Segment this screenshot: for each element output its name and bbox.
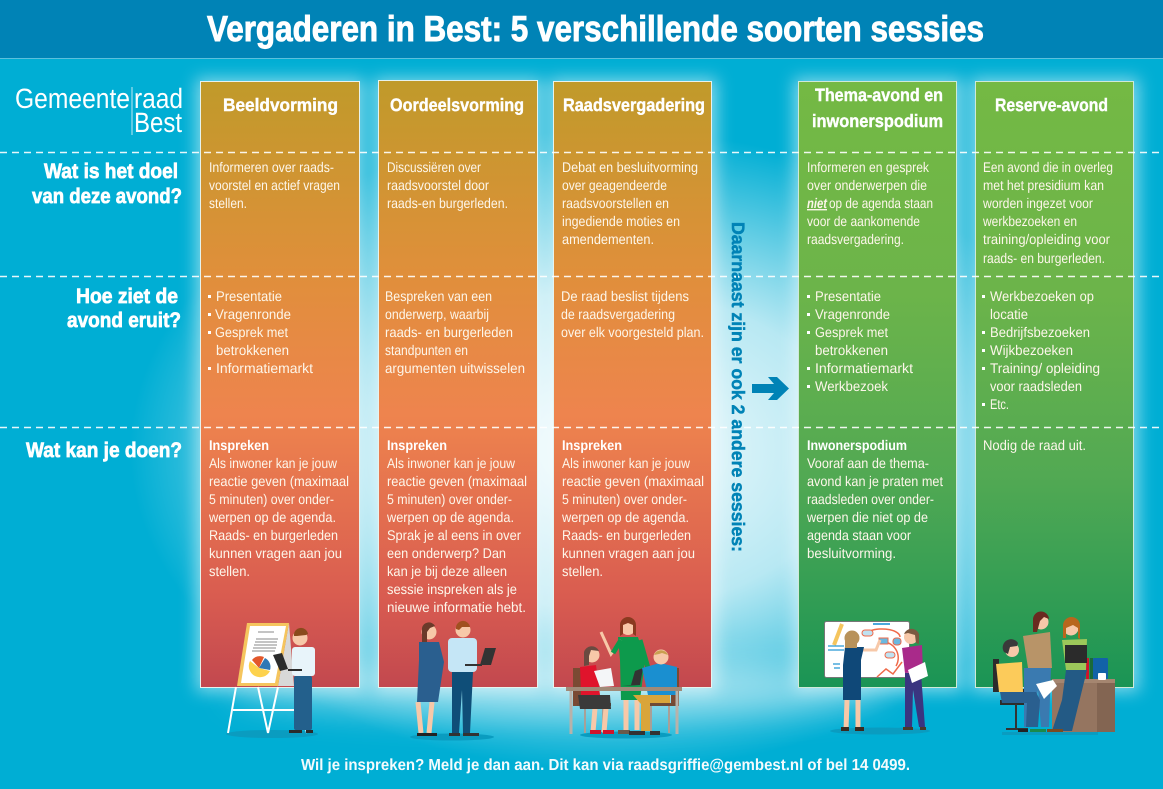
text: doen Beeldvorming: werpen op de agenda. (208, 509, 336, 525)
text: vorm Oordeelsvorming: Bespreken van een (385, 288, 492, 304)
text: doel Oordeelsvorming (387, 159, 508, 211)
text: doel Beeldvorming: Informeren over raads- (209, 159, 334, 175)
text: vorm Raadsvergadering: De raad beslist tijdens (561, 288, 689, 304)
text: doen Oordeelsvorming: reactie geven (maximaal (387, 473, 527, 489)
text: doen Beeldvorming: reactie geven (maximaal (209, 473, 349, 489)
text: doen Thema-avond: raadsleden over onder- (807, 491, 934, 507)
text: doel Beeldvorming (209, 159, 340, 211)
text: doen Oordeelsvorming (386, 437, 527, 615)
vertical text: Daarnaast zijn er ook 2 andere sessies: Daarnaast zijn er ook 2 andere sessies: (728, 222, 748, 552)
text: doen Oordeelsvorming: werpen op de agenda. (386, 509, 514, 525)
row label: Wat is het doel van deze avond?: van deze avond? (32, 185, 182, 208)
list: vorm Thema-avond: Vragenronde (815, 306, 890, 322)
text: doen Reserve-avond: Nodig de raad uit. (983, 437, 1086, 453)
text: vorm Oordeelsvorming: argumenten uitwisselen (385, 360, 525, 376)
text: doen Thema-avond: Inwonerspodium (807, 437, 907, 453)
list: vorm Reserve-avond: Training/ opleiding (990, 360, 1100, 376)
logo: Gemeenteraad Best: Gemeente (15, 83, 130, 114)
text: doen Beeldvorming: Inspreken (209, 437, 269, 453)
text: doel Reserve-avond (982, 159, 1113, 266)
list: vorm Reserve-avond: locatie (990, 306, 1028, 322)
text: vorm Oordeelsvorming: raads- en burgerleden (385, 324, 513, 340)
text: doel Thema-avond: niet (807, 195, 828, 211)
text: doen Raadsvergadering (561, 437, 704, 579)
text: doel Raadsvergadering: amendementen. (562, 231, 654, 247)
row label: Wat kan je doen?: Wat kan je doen? (26, 439, 182, 462)
heading: Thema-avond en inwonerspodium: inwonerspodium (812, 111, 943, 131)
arrow (752, 377, 789, 400)
text: doel Oordeelsvorming: raads-en burgerleden. (387, 195, 508, 211)
list: vorm Beeldvorming: Vragenronde (215, 306, 291, 322)
text: doel Reserve-avond: Een avond die in overleg (983, 159, 1113, 175)
text: doen Oordeelsvorming: 5 minuten) over onder- (387, 491, 512, 507)
text: doen Beeldvorming (208, 437, 349, 579)
text: vorm Oordeelsvorming: standpunten en (385, 342, 468, 358)
text: doen Thema-avond: agenda staan voor (807, 527, 911, 543)
text: doen Raadsvergadering: Raads- en burgerleden (562, 527, 691, 543)
illustration: presenter with flip chart (226, 623, 318, 738)
text: doel Reserve-avond: raads- en burgerleden. (983, 250, 1105, 266)
text: doel Oordeelsvorming: raadsvoorstel door (387, 177, 489, 193)
text: doel Thema-avond: op de agenda staan (829, 195, 933, 211)
heading: Thema-avond en inwonerspodium: Thema-avond en (815, 85, 943, 105)
panel: Raadsvergadering (554, 82, 712, 688)
illustration: meeting at a table (566, 617, 682, 738)
logo: Gemeenteraad Best: Best (134, 107, 182, 138)
text: doen Raadsvergadering: 5 minuten) over onder- (562, 491, 687, 507)
list: vorm Beeldvorming: Informatiemarkt (216, 360, 313, 376)
text: doen Raadsvergadering: kunnen vragen aan jou (562, 545, 695, 561)
text: doen Oordeelsvorming: kan je bij deze alleen (387, 563, 507, 579)
text: doel Beeldvorming: voorstel en actief vragen (209, 177, 340, 193)
text: doen Raadsvergadering: Als inwoner kan je jouw (562, 455, 691, 471)
row label: Hoe ziet de avond eruit? (67, 285, 181, 332)
text: doel Reserve-avond: training/opleiding voor (983, 231, 1110, 247)
heading: Oordeelsvorming: Oordeelsvorming (390, 95, 524, 115)
panel: Oordeelsvorming (378, 80, 538, 688)
text: doen Beeldvorming: Als inwoner kan je jouw (209, 455, 338, 471)
text: doen Oordeelsvorming: nieuwe informatie hebt. (387, 599, 526, 615)
list: vorm Thema-avond: Werkbezoek (815, 378, 889, 394)
text: doen Thema-avond (806, 437, 943, 561)
text: vorm Raadsvergadering: over elk voorgesteld plan. (561, 324, 704, 340)
title: Vergaderen in Best: 5 verschillende soorten sessies (207, 8, 984, 49)
text: vorm Oordeelsvorming (385, 288, 525, 376)
panel: Reserve-avond (976, 82, 1134, 688)
text: doen Oordeelsvorming: sessie inspreken als je (387, 581, 517, 597)
text: doen Raadsvergadering: werpen op de agenda. (561, 509, 689, 525)
text: vorm Raadsvergadering (561, 288, 704, 340)
header band (0, 0, 1163, 59)
text: doel Thema-avond: raadsvergadering. (807, 231, 904, 247)
list: vorm Reserve-avond: Bedrijfsbezoeken (990, 324, 1090, 340)
text: doel Reserve-avond: met het presidium kan (983, 177, 1104, 193)
text: doel Thema-avond: Informeren en gesprek (807, 159, 930, 175)
logo: Gemeenteraad Best (15, 83, 183, 138)
text: doel Raadsvergadering: Debat en besluitvorming (562, 159, 698, 175)
text: doel Thema-avond (807, 159, 933, 247)
row label: Wat is het doel van deze avond?: Wat is het doel (44, 160, 178, 183)
list: vorm Reserve-avond: Wijkbezoeken (990, 342, 1073, 358)
text: doen Beeldvorming: 5 minuten) over onder- (209, 491, 334, 507)
list: vorm Reserve-avond: Etc. (990, 396, 1009, 412)
panel: Thema-avond en inwonerspodium (798, 82, 956, 688)
list: vorm Beeldvorming: betrokkenen (216, 342, 289, 358)
panel: Beeldvorming (200, 82, 360, 688)
heading: Thema-avond en inwonerspodium (812, 85, 943, 131)
text: doel Raadsvergadering: over geagendeerde (562, 177, 667, 193)
text: doel Oordeelsvorming: Discussiëren over (387, 159, 481, 175)
row label: Hoe ziet de avond eruit?: avond eruit? (67, 309, 181, 332)
logo: Gemeenteraad Best: raad (134, 83, 183, 114)
text: doel Reserve-avond: worden ingezet voor (982, 195, 1093, 211)
text: doen Thema-avond: avond kan je praten met (807, 473, 943, 489)
text: doen Oordeelsvorming: Sprak je al eens in over (387, 527, 521, 543)
list: vorm Thema-avond: Gesprek met (815, 324, 888, 340)
text: doen Thema-avond: besluitvorming. (807, 545, 896, 561)
heading: Raadsvergadering: Raadsvergadering (563, 95, 705, 115)
row label: Wat is het doel van deze avond? (32, 160, 182, 208)
text: doel Thema-avond: over onderwerpen die (807, 177, 927, 193)
list: vorm Reserve-avond (982, 288, 1100, 412)
list: vorm Thema-avond: betrokkenen (815, 342, 888, 358)
text: doen Oordeelsvorming: een onderwerp? Dan (387, 545, 506, 561)
text: doen Oordeelsvorming: Inspreken (387, 437, 447, 453)
text: doen Raadsvergadering: reactie geven (maximaal (562, 473, 704, 489)
text: doen Beeldvorming: stellen. (209, 563, 250, 579)
text: doel Reserve-avond: werkbezoeken en (982, 213, 1077, 229)
text: doen Beeldvorming: kunnen vragen aan jou (209, 545, 342, 561)
list: vorm Thema-avond: Informatiemarkt (815, 360, 913, 376)
text: doen Raadsvergadering: stellen. (562, 563, 603, 579)
text: doen Oordeelsvorming: Als inwoner kan je jouw (387, 455, 516, 471)
text: doel Thema-avond: voor de aankomende (807, 213, 920, 229)
text: doel Raadsvergadering: ingediende moties en (562, 213, 680, 229)
illustration: team around a desk (993, 611, 1115, 735)
text: doel Beeldvorming: stellen. (209, 195, 247, 211)
row label: Hoe ziet de avond eruit?: Hoe ziet de (76, 285, 178, 308)
list: vorm Beeldvorming: Presentatie (216, 288, 282, 304)
list: vorm Reserve-avond: Werkbezoeken op (990, 288, 1094, 304)
footer call to action: Wil je inspreken? Meld je dan aan. Dit kan via raadsgriffie@gembest.nl of bel 14 0499. (301, 757, 910, 774)
text: doel Raadsvergadering: raadsvoorstellen en (562, 195, 669, 211)
text: vorm Raadsvergadering: de raadsvergadering (561, 306, 675, 322)
text: doel Raadsvergadering (562, 159, 698, 247)
illustration: two colleagues with laptop (410, 621, 496, 740)
text: doen Thema-avond: werpen die niet op de (806, 509, 928, 525)
text: doen Beeldvorming: Raads- en burgerleden (209, 527, 338, 543)
list: vorm Reserve-avond: voor raadsleden (990, 378, 1082, 394)
list: vorm Beeldvorming: Gesprek met (215, 324, 288, 340)
text: vorm Oordeelsvorming: onderwerp, waarbij (385, 306, 489, 322)
text: doen Raadsvergadering: Inspreken (562, 437, 622, 453)
heading: Reserve-avond: Reserve-avond (995, 95, 1108, 115)
list: vorm Thema-avond (807, 288, 913, 394)
illustration: whiteboard session (824, 622, 930, 734)
list: vorm Thema-avond: Presentatie (815, 288, 881, 304)
text: doen Thema-avond: Vooraf aan de thema- (807, 455, 929, 471)
heading: Beeldvorming: Beeldvorming (223, 95, 338, 115)
list: vorm Beeldvorming (208, 288, 313, 376)
